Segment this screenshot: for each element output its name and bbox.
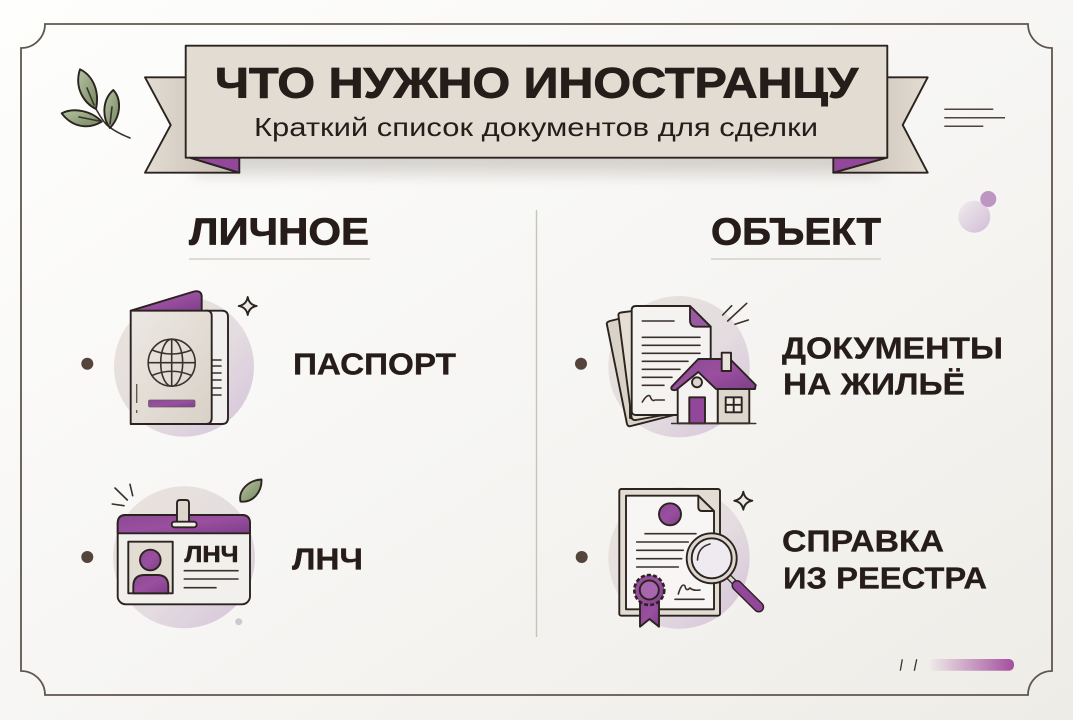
heading: property: ОБЪЕКТ [711, 212, 881, 254]
icon: certificate and magnifier [608, 487, 759, 629]
icon: sparkle [239, 297, 257, 315]
icon: ID card [113, 486, 255, 628]
icon: rays [112, 484, 133, 506]
banner panel [186, 46, 887, 158]
banner shadow [195, 70, 880, 174]
label: residence card: ЛНЧ [292, 542, 363, 576]
bullet [575, 358, 587, 370]
footer accent [900, 659, 1014, 671]
label: registry certificate: ИЗ РЕЕСТРА [783, 560, 987, 596]
label: housing documents: НА ЖИЛЬЁ [783, 366, 965, 402]
right ribbon fold [833, 158, 887, 173]
icon: passport [114, 291, 254, 437]
item: housing documents [575, 296, 1003, 437]
seal [640, 601, 659, 627]
bullet [576, 551, 588, 563]
decorative lines [944, 109, 1005, 126]
left ribbon fold [190, 158, 239, 173]
icon: documents and house [607, 296, 756, 437]
label: passport: ПАСПОРТ [293, 346, 456, 382]
subtitle: Краткий список документов для сделки [254, 112, 818, 142]
label: registry certificate: СПРАВКА [782, 524, 944, 558]
title: ЧТО НУЖНО ИНОСТРАНЦУ [215, 60, 859, 108]
label: housing documents [782, 330, 1003, 402]
decorative bubbles [958, 191, 996, 233]
decorative dot [235, 618, 242, 625]
item: registry certificate [576, 487, 987, 629]
label: housing documents: ДОКУМЕНТЫ [782, 330, 1003, 366]
magnifier [728, 576, 735, 583]
icon: leaf [240, 480, 262, 502]
card text: ЛНЧ [184, 541, 238, 567]
label: registry certificate [782, 524, 987, 596]
heading: personal: ЛИЧНОЕ [189, 212, 369, 254]
icon: sparkle [734, 492, 752, 510]
bullet [81, 358, 93, 370]
item: passport [81, 291, 456, 437]
item: residence card [81, 480, 363, 628]
banner [145, 46, 928, 174]
icon: olive branch [62, 69, 130, 138]
left ribbon tail [145, 77, 239, 173]
column divider [536, 210, 538, 637]
bullet [81, 551, 93, 563]
right ribbon tail [833, 77, 928, 173]
icon: rays [723, 303, 748, 324]
